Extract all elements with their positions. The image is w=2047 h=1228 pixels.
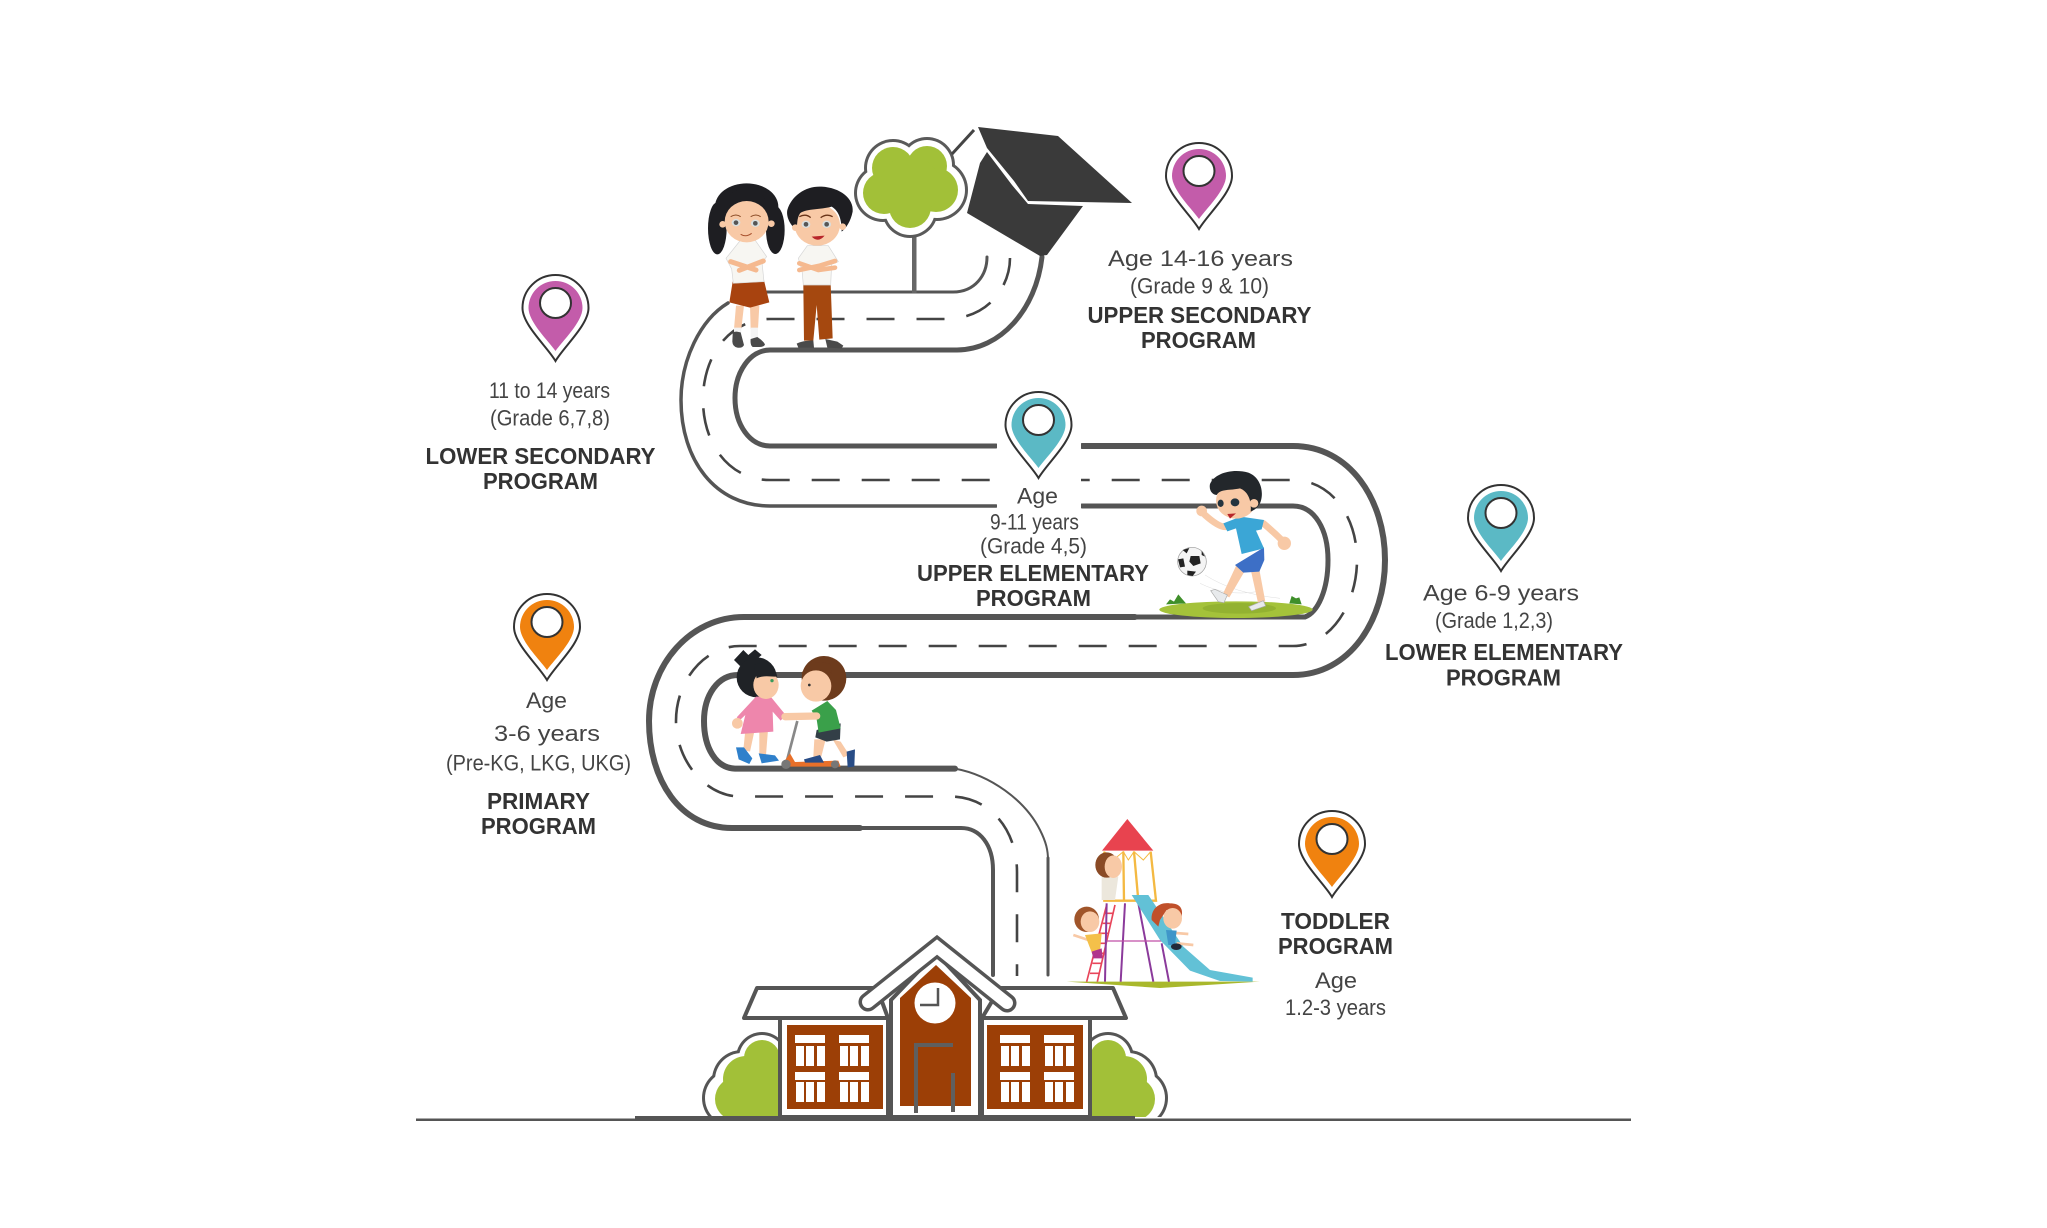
lower secondary age: 11 to 14 years: [489, 378, 610, 403]
lower secondary title: LOWER SECONDARY: [426, 443, 656, 469]
lower elementary age: Age 6-9 years: [1423, 580, 1579, 606]
clock tower: [891, 953, 980, 1117]
pin: upper elementary: [1006, 392, 1072, 478]
graduation cap: [952, 127, 1132, 256]
tree: [854, 137, 968, 293]
pin: lower elementary: [1468, 485, 1534, 571]
stage: primary program: (Pre-KG, LKG, UKG): [446, 750, 631, 776]
stage: toddler program: [1278, 811, 1393, 1020]
school kids: girl and boy: [708, 183, 853, 348]
playground slide: [1067, 819, 1260, 988]
lower elementary title: LOWER ELEMENTARY: [1385, 639, 1623, 665]
ground line: [416, 1116, 1631, 1121]
scooter: [781, 721, 841, 769]
pin: primary: [514, 594, 580, 680]
frame: [1104, 852, 1169, 982]
roof: [1102, 819, 1153, 851]
upper elementary title: UPPER ELEMENTARY: [917, 560, 1149, 586]
upper secondary age: Age 14-16 years: [1108, 246, 1293, 271]
ground: [1067, 982, 1260, 988]
upper secondary title: UPPER SECONDARY: [1088, 302, 1312, 328]
stage: upper elementary: (Grade 4,5): [980, 534, 1087, 558]
child on tower: [1095, 852, 1122, 900]
pin: lower secondary: [522, 275, 588, 361]
stage: upper secondary: [1088, 143, 1312, 353]
stage: lower secondary: (Grade 6,7,8): [490, 406, 610, 430]
winding road: [649, 257, 1385, 976]
stage: upper secondary: PROGRAM: [1141, 327, 1256, 353]
pin: toddler: [1299, 811, 1365, 897]
stage: lower secondary: PROGRAM: [483, 468, 598, 494]
child on slide: [1152, 903, 1193, 950]
primary age: Age: [526, 688, 567, 713]
stage: primary program: 3-6 years: [494, 721, 600, 746]
gable roof: [868, 947, 1007, 1003]
soccer boy with ball: [1159, 471, 1313, 618]
stage: toddler program: PROGRAM: [1278, 933, 1393, 959]
stage: upper elementary: 9-11 years: [990, 510, 1079, 534]
roof wings: [744, 988, 1126, 1018]
school building: [690, 947, 1180, 1147]
girl: [708, 183, 785, 348]
stage: primary program: PROGRAM: [481, 813, 596, 839]
bushes: [690, 1032, 1180, 1147]
toddler title: TODDLER: [1281, 908, 1390, 934]
upper elementary age: Age: [1017, 484, 1058, 508]
primary title: PRIMARY: [487, 788, 590, 814]
left wing: [780, 1018, 888, 1117]
stage: lower secondary: [426, 275, 656, 494]
body: [1196, 471, 1291, 611]
stage: upper elementary: [917, 392, 1149, 611]
right wing: [982, 1018, 1090, 1117]
boy: [787, 187, 853, 348]
pin: upper secondary: [1166, 143, 1232, 229]
child on ladder: [1073, 907, 1103, 958]
stage: lower elementary: [1385, 485, 1623, 690]
toddler age: Age: [1315, 968, 1357, 993]
stage: upper elementary: PROGRAM: [976, 585, 1091, 611]
boy: [785, 656, 855, 767]
soccer ball: [1178, 547, 1206, 576]
stage: upper secondary: (Grade 9 & 10): [1130, 274, 1269, 298]
stage: primary program: [446, 594, 631, 839]
grass: [1159, 594, 1313, 618]
stage: lower elementary: PROGRAM: [1446, 664, 1561, 690]
stage: toddler program: 1.2-3 years: [1285, 995, 1386, 1020]
scooter kids: [732, 649, 855, 769]
white knockout behind upper elementary pin: [997, 440, 1081, 512]
girl: [732, 649, 786, 764]
slide: [1132, 895, 1253, 982]
stage: lower elementary: (Grade 1,2,3): [1435, 608, 1553, 633]
ladder: [1087, 905, 1115, 982]
